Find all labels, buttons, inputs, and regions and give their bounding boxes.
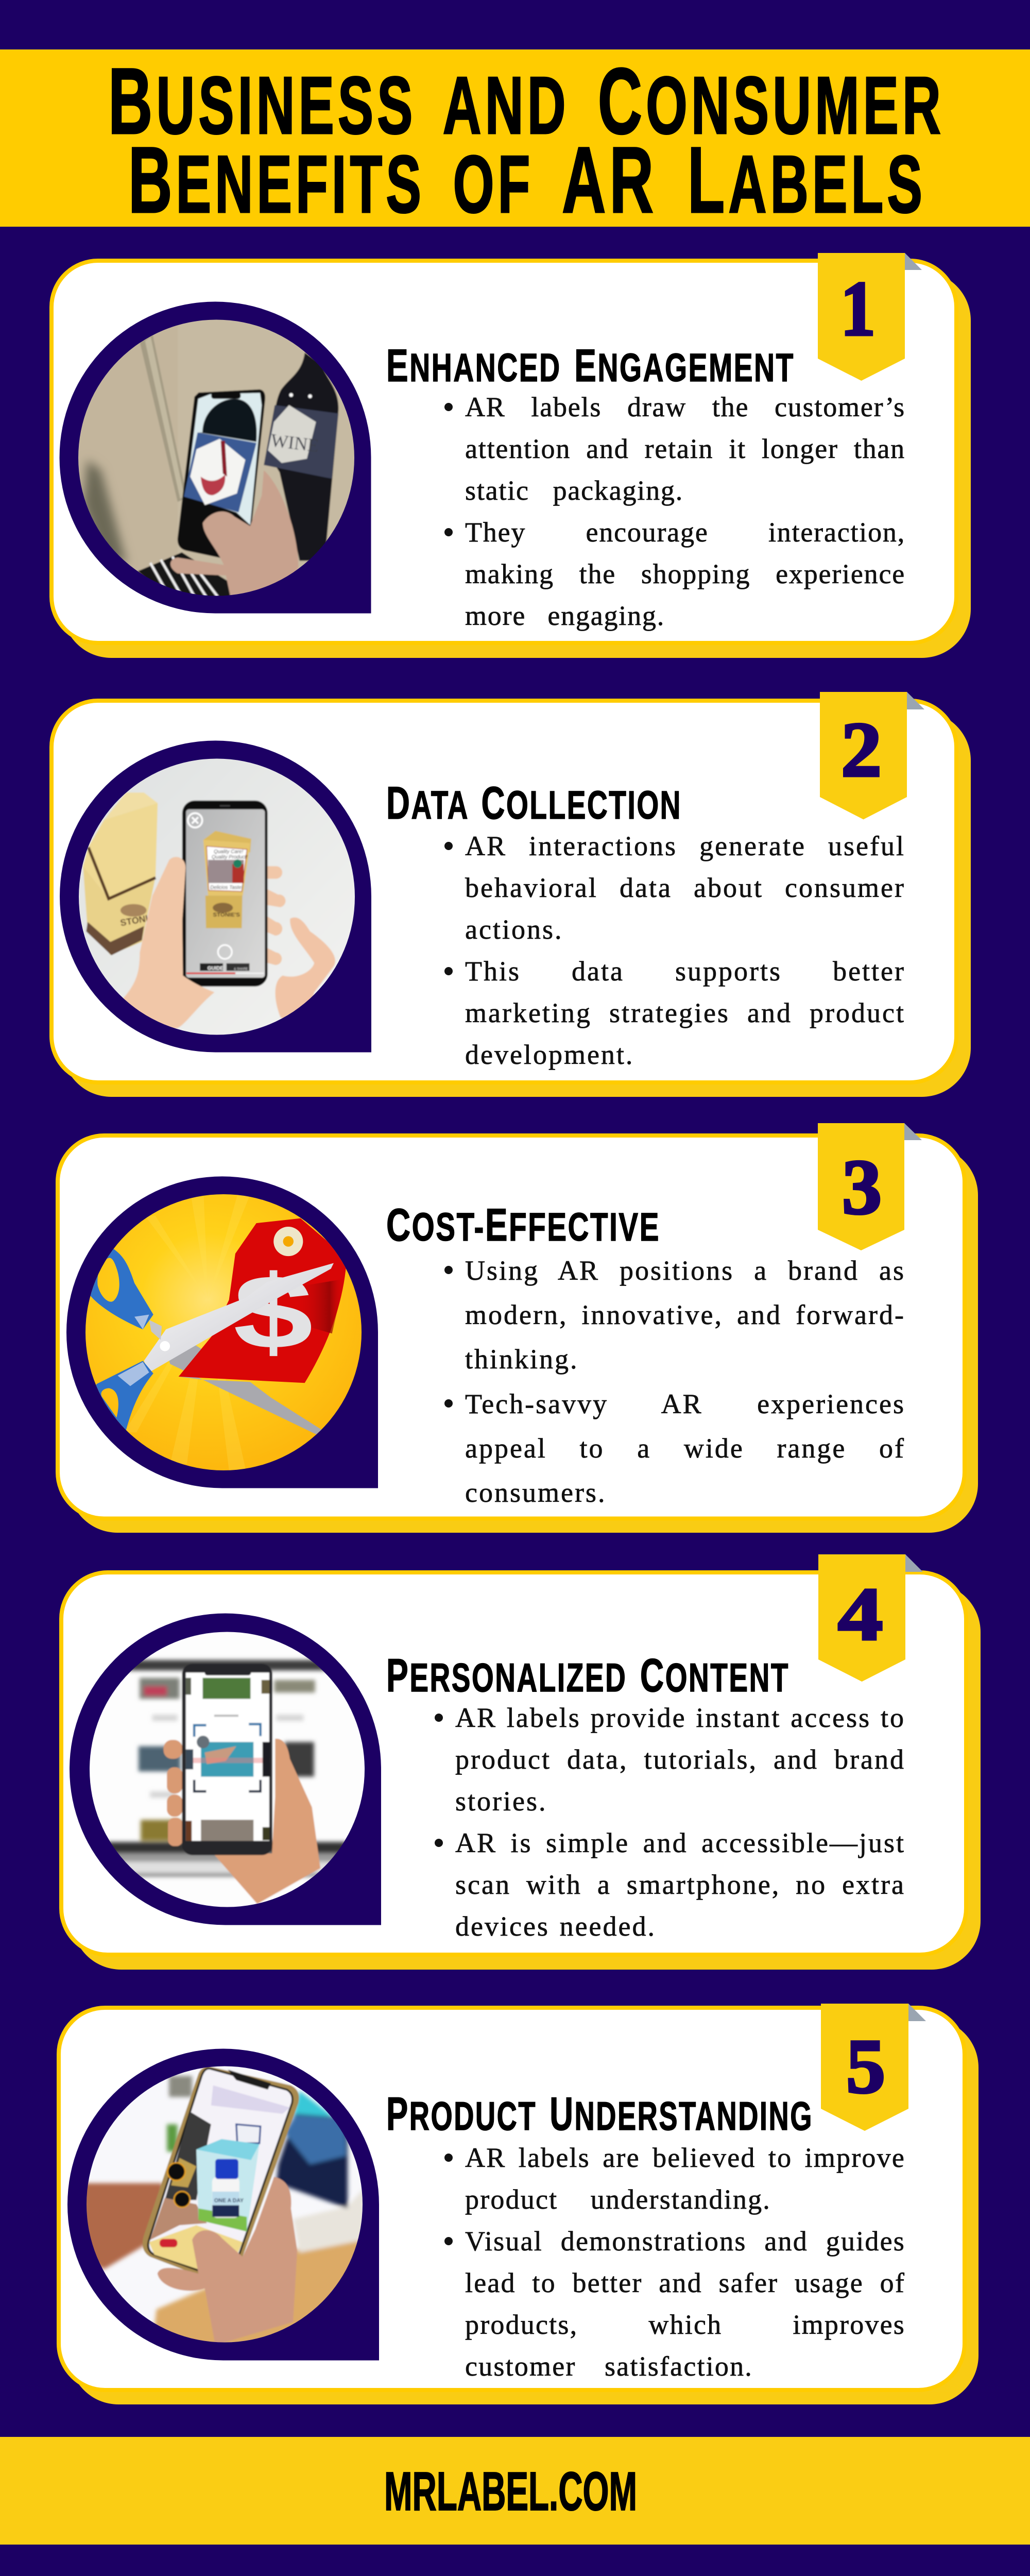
photo: phone showing AR supplement bottle (62, 2040, 391, 2370)
text block: data bullets: This data supports better (465, 956, 905, 987)
text block: engagement bullets: They encourage interaction, (465, 517, 905, 548)
text block: data bullets (444, 831, 905, 1070)
heading: PERSONALIZED CONTENT (386, 1650, 789, 1702)
text block: engagement bullets: AR labels draw the customer’s (465, 392, 905, 422)
text block: personalized bullets: product data, tutorials, and brand (455, 1744, 905, 1775)
illustration: scissors cutting price tag: $ (233, 1253, 313, 1371)
photo: phone scanning wine bottle: WINE (270, 430, 320, 456)
photo: phone scanning product box (79, 758, 355, 1035)
heading: PRODUCT UNDERSTANDING (386, 2088, 813, 2140)
panel: product understanding (57, 2004, 978, 2404)
icon: photo pin frame (60, 741, 371, 1052)
badge: number 1 (818, 253, 922, 381)
photo: phone scanning product box: & SHARE (234, 967, 248, 971)
text block: understanding bullets: AR labels are believed to improve (465, 2142, 905, 2173)
title (108, 48, 945, 232)
text block: understanding bullets: customer satisfaction. (465, 2351, 753, 2382)
badge: number 2: 2 (841, 706, 882, 793)
heading: COST-EFFECTIVE (386, 1199, 660, 1250)
text block: personalized bullets: devices needed. (455, 1911, 656, 1942)
card artwork (49, 253, 971, 658)
text block: engagement bullets (444, 392, 905, 631)
text block: cost bullets: appeal to a wide range of (465, 1433, 905, 1464)
badge: number 3 (818, 1123, 922, 1250)
illustration: scissors cutting price tag (57, 1170, 386, 1499)
photo: phone scanning product box: STONIE'S (119, 910, 163, 928)
text block: data bullets: actions. (465, 914, 563, 945)
text block: cost bullets: modern, innovative, and forward- (465, 1299, 905, 1330)
heading: ENHANCED ENGAGEMENT (386, 340, 795, 391)
text block: cost bullets: thinking. (465, 1344, 579, 1375)
text block: personalized bullets: AR is simple and accessible—just (455, 1827, 905, 1858)
text block: personalized bullets (435, 1702, 905, 1942)
title: BENEFITS OF AR LABELS (128, 127, 926, 232)
badge: number 4 (818, 1554, 923, 1682)
text block: engagement bullets: static packaging. (465, 475, 683, 506)
card artwork (57, 2004, 978, 2404)
badge: number 3: 3 (842, 1144, 882, 1230)
icon: photo pin frame (67, 2048, 379, 2361)
text block: data bullets: marketing strategies and product (465, 997, 905, 1028)
badge: number 2 (820, 692, 924, 819)
text block: cost bullets: Using AR positions a brand as (465, 1255, 905, 1286)
heading: DATA COLLECTION (386, 777, 682, 828)
text block: understanding bullets (444, 2142, 905, 2382)
photo: phone scanning product box: Quality Care! (214, 849, 243, 855)
panel: data collection (49, 692, 971, 1097)
text block: engagement bullets: more engaging. (465, 600, 665, 631)
photo: phone scanning wine bottle (78, 319, 354, 596)
text block: personalized bullets: stories. (455, 1786, 547, 1817)
photo: phone scanning product box: GUIDE (208, 965, 224, 971)
text block: understanding bullets: products, which improves (465, 2309, 905, 2340)
text block: personalized bullets: AR labels provide instant access to (455, 1702, 905, 1733)
title banner (0, 49, 1030, 227)
photo: phone scanning product box: Quality Product! (212, 855, 248, 860)
text block: data bullets: behavioral data about consumer (465, 872, 905, 903)
text block: engagement bullets: making the shopping experience (465, 558, 905, 589)
card artwork (56, 1123, 978, 1533)
photo: phone showing AR supplement bottle: ONE A DAY (214, 2197, 244, 2204)
footer banner (0, 2437, 1030, 2545)
text block: cost bullets (444, 1255, 905, 1508)
badge: number 5: 5 (846, 2024, 885, 2109)
text block: understanding bullets: lead to better and safer usage of (465, 2267, 905, 2298)
photo: phone scanning product box: Delicios Taste! (210, 885, 243, 890)
badge: number 1: 1 (840, 265, 876, 352)
icon: photo pin frame (60, 302, 371, 613)
text block: data bullets: development. (465, 1039, 634, 1070)
footer website text: MRLABEL.COM (384, 2461, 637, 2522)
text block: data bullets: AR interactions generate useful (465, 831, 905, 861)
photo: phone scanning catalogue page (62, 1607, 391, 1937)
text block: cost bullets: consumers. (465, 1477, 606, 1508)
card artwork (49, 692, 971, 1097)
text block: cost bullets: Tech-savvy AR experiences (465, 1388, 905, 1419)
card artwork (59, 1554, 981, 1970)
panel: personalized content (59, 1554, 981, 1970)
text block: understanding bullets: Visual demonstrations and guides (465, 2226, 905, 2257)
icon: photo pin frame (66, 1176, 378, 1488)
panel: cost-effective (56, 1123, 978, 1533)
badge: number 4: 4 (838, 1572, 883, 1656)
panel: enhanced engagement (49, 253, 971, 658)
text block: personalized bullets: scan with a smartphone, no extra (455, 1869, 905, 1900)
icon: photo pin frame (70, 1614, 381, 1925)
text block: engagement bullets: attention and retain it longer than (465, 433, 905, 464)
photo: phone scanning product box: STONIE'S (213, 912, 240, 918)
badge: number 5 (821, 2004, 926, 2131)
text block: understanding bullets: product understanding. (465, 2184, 771, 2215)
